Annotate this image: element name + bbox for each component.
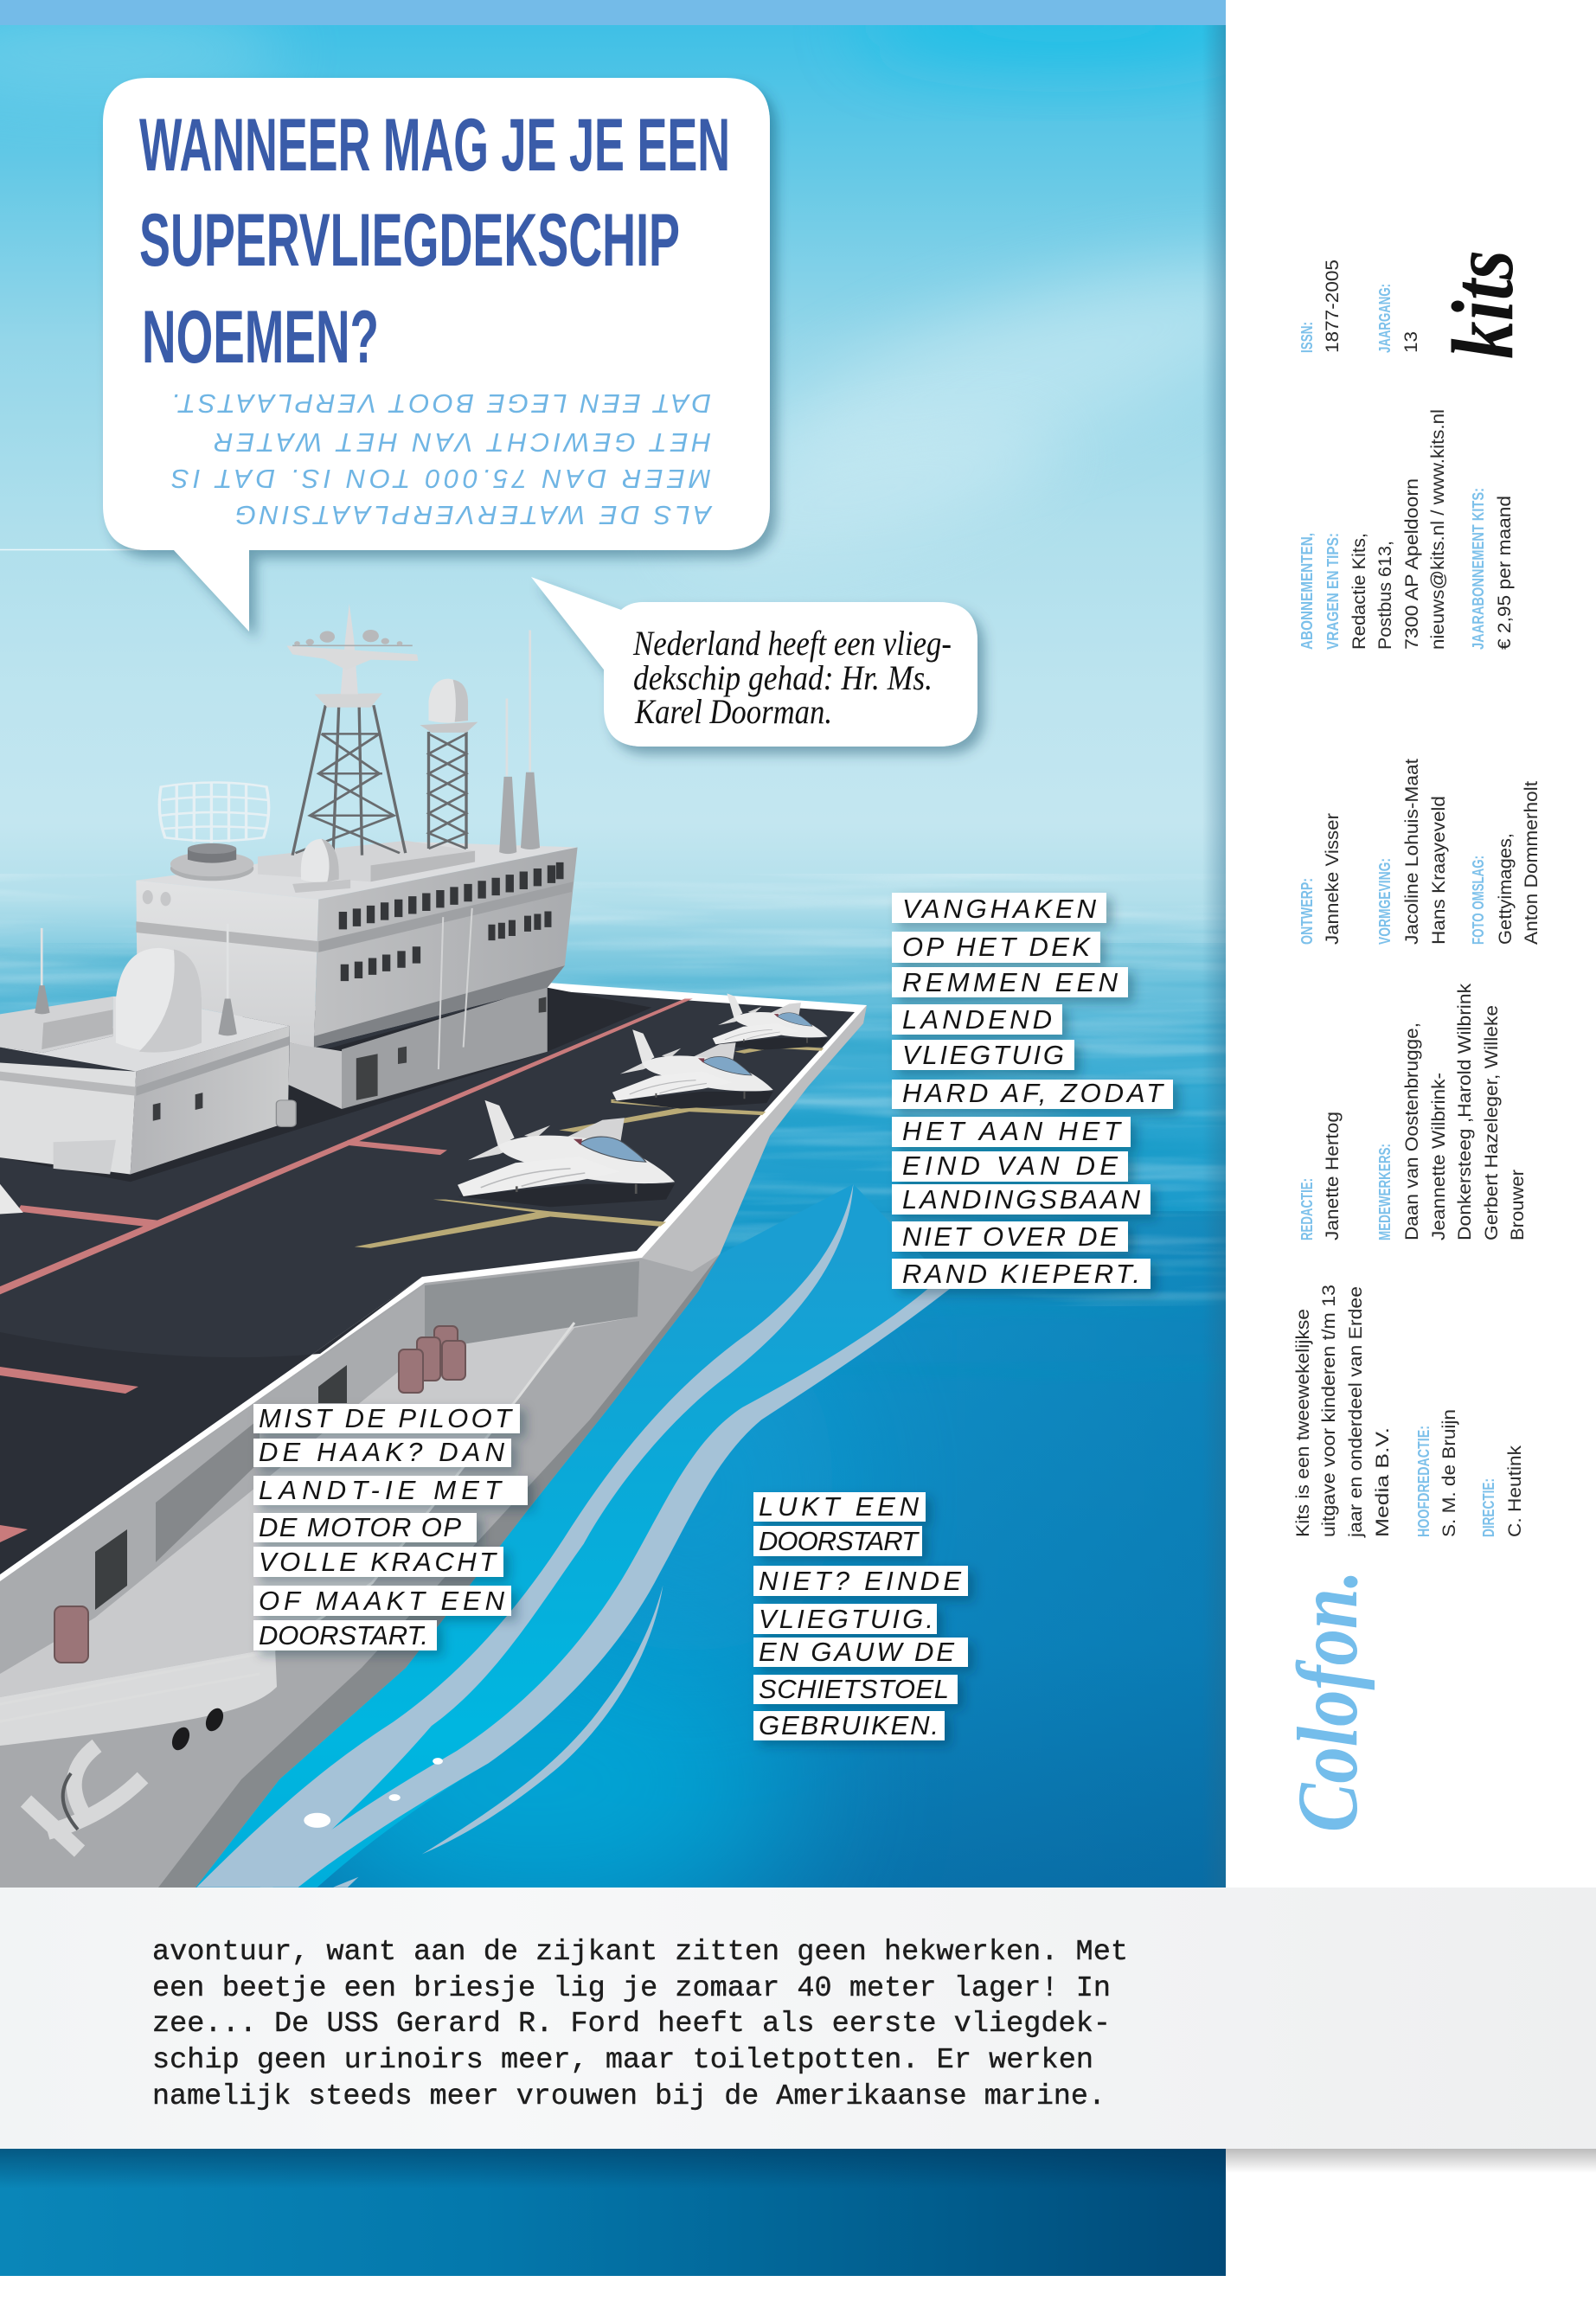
colofon: intro column: Kits is een tweewekelijkse xyxy=(1293,1309,1313,1537)
colofon: intro column: S. M. de Bruijn xyxy=(1439,1409,1459,1537)
caption: arresting hooks: HET AAN HET xyxy=(902,1116,1122,1146)
colofon: editors column: Daan van Oostenbrugge, xyxy=(1402,1022,1422,1240)
caption: arresting hooks: HARD AF, ZODAT xyxy=(902,1078,1164,1108)
colofon: subscriptions column: ABONNEMENTEN, xyxy=(1298,533,1316,650)
oil barrels xyxy=(54,1326,465,1663)
colofon: design column: Anton Dommerholt xyxy=(1522,781,1542,945)
colofon: subscriptions column: 7300 AP Apeldoorn xyxy=(1402,478,1422,650)
caption: missed hook xyxy=(253,1403,528,1650)
portholes xyxy=(169,1706,227,1753)
colofon: issn column: ISSN: xyxy=(1298,322,1316,353)
aircraft wing at edge xyxy=(0,1184,23,1214)
colofon: intro column: C. Heutink xyxy=(1505,1445,1525,1537)
wake: bright water xyxy=(158,1184,952,1888)
colofon: design column: ONTWERP: xyxy=(1298,878,1316,945)
bow lip xyxy=(0,1648,277,1746)
large radome xyxy=(116,948,202,1053)
lattice mast second xyxy=(429,732,466,849)
caption: arresting hooks: RAND KIEPERT. xyxy=(902,1259,1140,1289)
caption: arresting hooks: VANGHAKEN xyxy=(902,894,1097,924)
mast top xyxy=(286,604,418,708)
aircraft three xyxy=(713,993,828,1050)
wake: foam bubbles xyxy=(304,1758,443,1828)
upper small block xyxy=(0,997,113,1053)
hull anchor emblem xyxy=(26,1746,143,1851)
second radar dome xyxy=(420,679,478,733)
yellow parking markings xyxy=(355,1042,824,1248)
colofon: editors column: Donkersteeg ,Harold Wilbrink xyxy=(1455,983,1475,1240)
typewriter text: een beetje een briesje lig je zomaar 40 meter lager! In xyxy=(152,1972,1111,2005)
caption: ejection seat: LUKT EEN xyxy=(759,1491,920,1522)
ship wake xyxy=(158,1184,952,1888)
gallery floor xyxy=(0,1317,638,1697)
Karel Doorman note: dekschip gehad: Hr. Ms. xyxy=(633,658,933,697)
ship superstructure xyxy=(0,604,828,1214)
caption: missed hook: OF MAAKT EEN xyxy=(259,1586,505,1616)
caption: arresting hooks: VLIEGTUIG xyxy=(902,1040,1064,1070)
caption: arresting hooks xyxy=(892,893,1173,1289)
upside-down answer: ALS DE WATERVERPLAATSING xyxy=(235,500,713,530)
colofon: subscriptions column xyxy=(1298,409,1515,650)
colofon: subscriptions column: Redactie Kits, xyxy=(1349,533,1369,650)
colofon: editors column: Brouwer xyxy=(1508,1170,1528,1240)
heading: SUPERVLIEGDEKSCHIP xyxy=(139,199,680,282)
caption: ejection seat: VLIEGTUIG. xyxy=(759,1604,933,1634)
typewriter text: avontuur, want aan de zijkant zitten geen hekwerken. Met xyxy=(152,1936,1128,1969)
gallery wall xyxy=(425,1261,639,1350)
Karel Doorman note: Nederland heeft een vlieg- xyxy=(632,624,952,663)
colofon: design column: Jacoline Lohuis-Maat xyxy=(1402,759,1422,945)
whip antennas xyxy=(499,630,540,854)
colofon: issn column: 1877-2005 xyxy=(1323,260,1343,353)
hull dark waterline strip xyxy=(158,1254,720,1888)
hull side xyxy=(0,1005,867,1888)
caption: missed hook: DOORSTART. xyxy=(259,1620,428,1650)
Karel Doorman note: Karel Doorman. xyxy=(634,692,832,731)
wake: small tip xyxy=(333,1877,358,1888)
doors and hatches xyxy=(95,1365,347,1610)
colofon: editors column: Janette Hertog xyxy=(1323,1112,1343,1240)
colofon: editors column: MEDEWERKERS: xyxy=(1376,1144,1394,1240)
caption: arresting hooks: OP HET DEK xyxy=(902,932,1091,962)
colofon: subscriptions column: VRAGEN EN TIPS: xyxy=(1324,533,1342,650)
caption: ejection seat: NIET? EINDE xyxy=(759,1566,961,1596)
caption: missed hook: LANDT-IE MET xyxy=(259,1475,503,1505)
red deck markings xyxy=(0,998,693,1294)
caption: ejection seat: GEBRUIKEN. xyxy=(759,1710,939,1740)
caption: ejection seat: EN GAUW DE xyxy=(759,1637,954,1667)
colofon: subscriptions column: Postbus 613, xyxy=(1375,541,1395,650)
colofon: intro column: uitgave voor kinderen t/m 13 xyxy=(1319,1285,1339,1537)
colofon: design column: Gettyimages, xyxy=(1496,833,1516,945)
radar pedestal xyxy=(170,843,253,881)
kits logo: kits xyxy=(1434,250,1532,359)
heading: WANNEER MAG JE JE EEN xyxy=(139,104,730,187)
ship hull xyxy=(0,1005,867,1888)
heading xyxy=(139,104,730,379)
typewriter text: schip geen urinoirs meer, maar toiletpotten. Er werken xyxy=(152,2044,1093,2077)
wake: crescent xyxy=(422,1586,663,1855)
main tower upper xyxy=(136,842,578,1069)
flight deck xyxy=(0,983,867,1581)
colofon: subscriptions column: nieuws@kits.nl / www.kits.nl xyxy=(1428,409,1448,650)
caption: arresting hooks: LANDINGSBAAN xyxy=(902,1184,1141,1215)
main tower lower xyxy=(288,985,548,1109)
paper shadow xyxy=(1226,2149,1596,2173)
caption: arresting hooks: LANDEND xyxy=(902,1004,1052,1035)
small dome on roof xyxy=(292,839,350,893)
bridge windows xyxy=(339,862,564,929)
wake: band one xyxy=(196,1184,853,1888)
door xyxy=(356,1054,378,1100)
colofon: design column xyxy=(1298,759,1542,945)
typewriter text: namelijk steeds meer vrouwen bij de Amerikaanse marine. xyxy=(152,2080,1106,2113)
colofon: intro column: Media B.V. xyxy=(1373,1427,1393,1537)
aircraft two xyxy=(612,1029,773,1109)
upside-down answer: MEER DAN 75.000 TON IS. DAT IS xyxy=(171,464,711,494)
net radar antenna xyxy=(159,781,269,843)
top colour band xyxy=(0,0,1226,25)
colofon: issn column: 13 xyxy=(1401,331,1421,353)
caption: ejection seat: DOORSTART xyxy=(759,1526,920,1556)
wake: band two xyxy=(260,1279,952,1888)
bottom blue band xyxy=(0,2149,1226,2276)
colofon: design column: Hans Kraayeveld xyxy=(1429,796,1449,945)
colofon: editors column: Jeannette Wilbrink- xyxy=(1429,1073,1449,1240)
Karel Doorman note xyxy=(632,624,952,731)
forward block xyxy=(0,997,290,1175)
caption: missed hook: VOLLE KRACHT xyxy=(259,1547,497,1577)
colofon: issn column xyxy=(1298,260,1421,353)
colofon: intro column: DIRECTIE: xyxy=(1480,1478,1497,1537)
typewriter text: zee... De USS Gerard R. Ford heeft als eerste vliegdek- xyxy=(152,2008,1111,2041)
speech bubble: main question xyxy=(103,78,770,631)
caption: missed hook: DE MOTOR OP xyxy=(259,1512,461,1542)
colofon: design column: Janneke Visser xyxy=(1323,813,1343,945)
caption: ejection seat: SCHIETSTOEL xyxy=(759,1674,949,1704)
deck shadow xyxy=(0,988,651,1182)
upside-down answer xyxy=(171,388,713,530)
caption: missed hook: MIST DE PILOOT xyxy=(259,1403,513,1433)
lattice mast main xyxy=(292,705,406,856)
colofon heading: Colofon. xyxy=(1279,1570,1375,1832)
speech bubble: Karel Doorman xyxy=(531,577,977,747)
colofon: subscriptions column: € 2,95 per maand xyxy=(1495,496,1515,650)
typewriter text xyxy=(152,1936,1128,2113)
upside-down answer: HET GEWICHT VAN HET WATER xyxy=(214,427,711,458)
paper strip xyxy=(0,1888,1596,2149)
heading: NOEMEN? xyxy=(142,296,379,379)
caption: ejection seat xyxy=(753,1491,968,1740)
barrel by tower xyxy=(276,1100,296,1126)
colofon: editors column xyxy=(1298,983,1528,1240)
caption: arresting hooks: NIET OVER DE xyxy=(902,1221,1118,1252)
background: sky and sea xyxy=(0,25,1226,1888)
caption: missed hook: DE HAAK? DAN xyxy=(259,1437,505,1467)
colofon: issn column: JAARGANG: xyxy=(1376,284,1394,353)
colofon: design column: FOTO OMSLAG: xyxy=(1470,856,1487,945)
colofon: intro column xyxy=(1293,1285,1525,1538)
railing xyxy=(0,1323,574,1721)
colofon: intro column: jaar en onderdeel van Erdee xyxy=(1346,1286,1366,1538)
deck antennas xyxy=(35,924,237,1035)
aircraft one xyxy=(458,1100,675,1207)
colofon: subscriptions column: JAARABONNEMENT KITS: xyxy=(1470,488,1487,650)
colofon: editors column: Gerbert Hazeleger, Willeke xyxy=(1482,1005,1502,1240)
colofon: editors column: REDACTIE: xyxy=(1298,1178,1316,1240)
roof step xyxy=(258,841,475,881)
upside-down answer: DAT EEN LEGE BOOT VERPLAATST. xyxy=(171,388,711,419)
caption: arresting hooks: REMMEN EEN xyxy=(902,967,1118,997)
caption: arresting hooks: EIND VAN DE xyxy=(902,1150,1118,1181)
colofon: design column: VORMGEVING: xyxy=(1376,858,1394,945)
colofon: intro column: HOOFDREDACTIE: xyxy=(1415,1426,1433,1537)
